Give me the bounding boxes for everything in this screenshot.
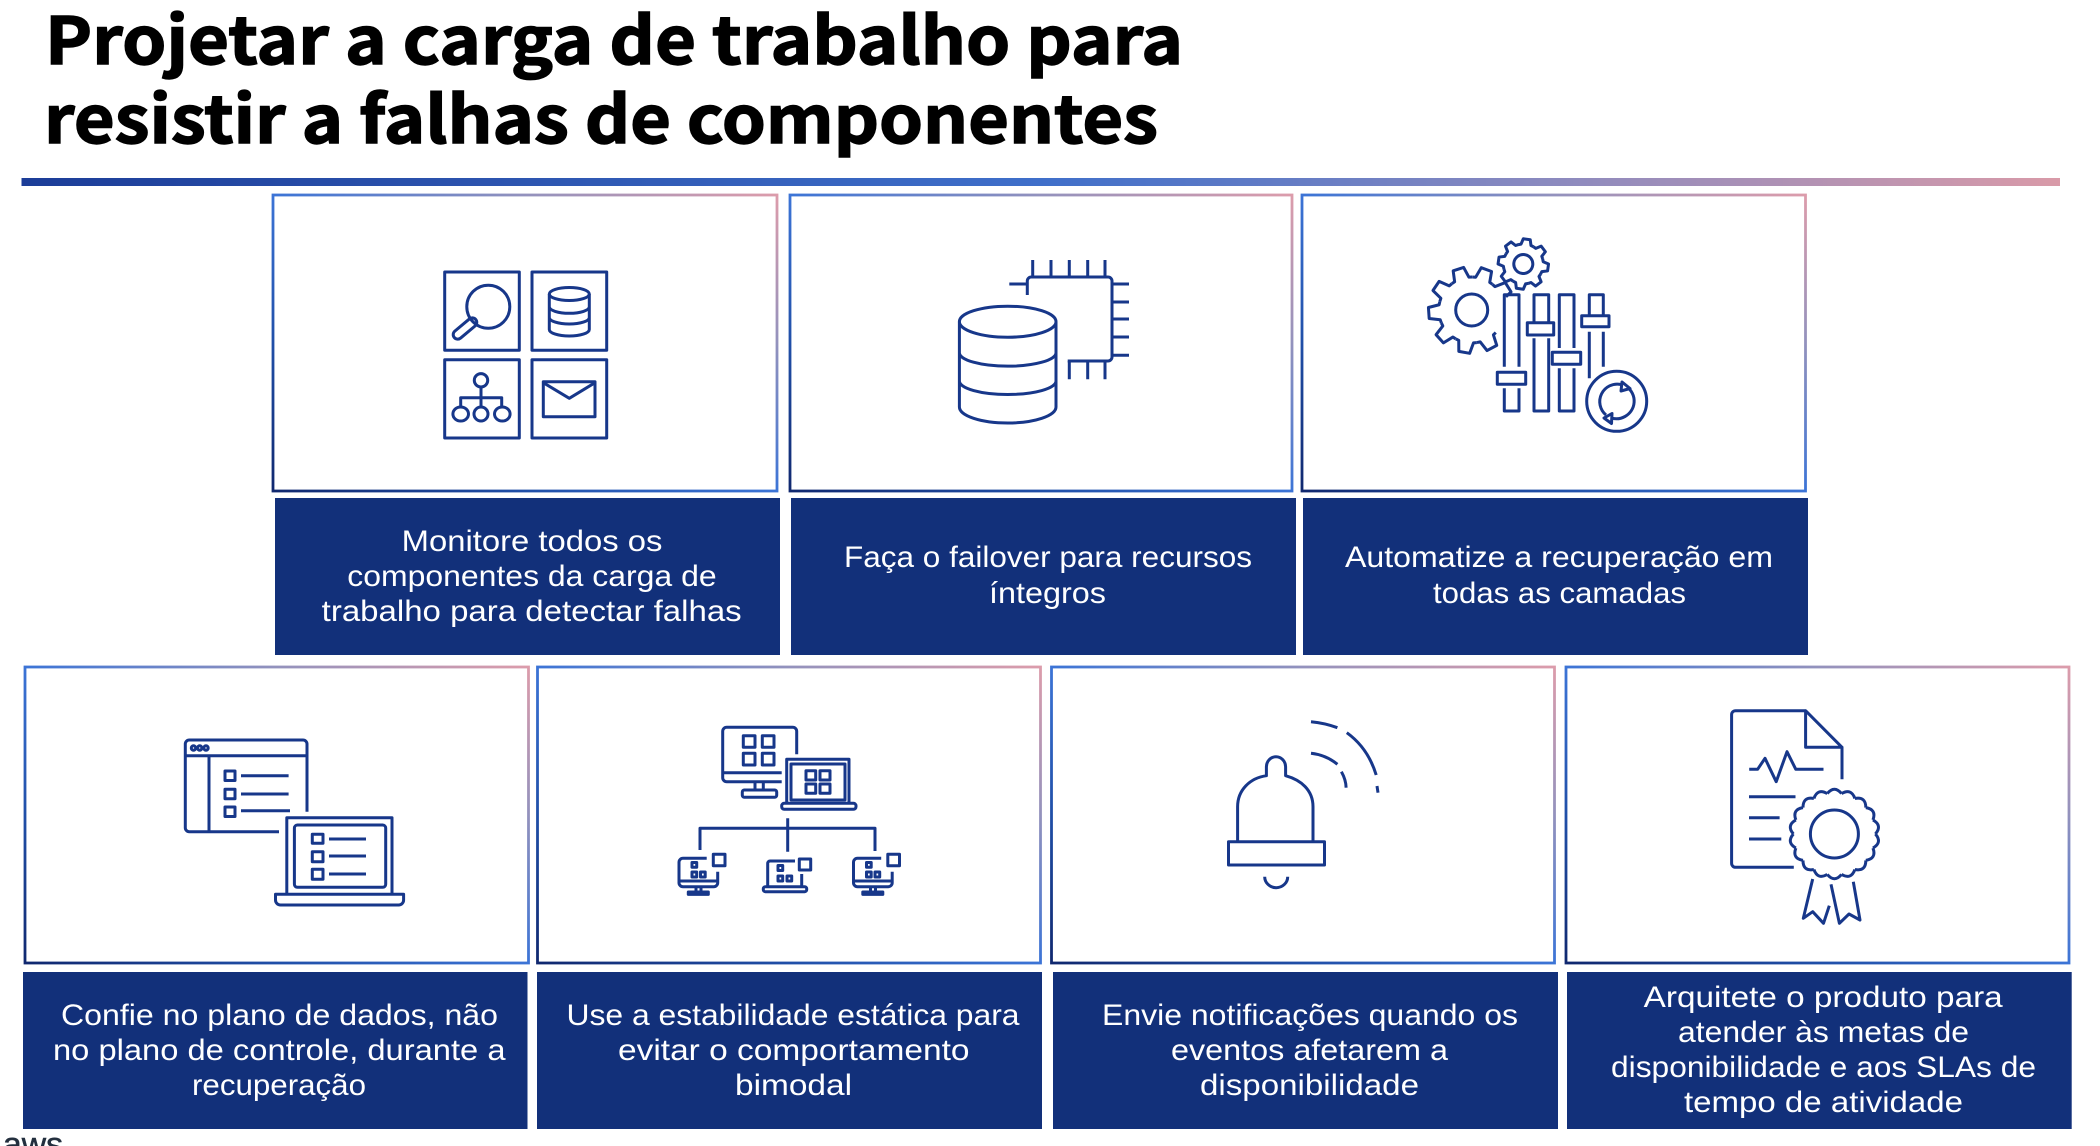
image frame: data plane	[25, 667, 528, 963]
caption: notifications: eventos afetarem a	[1171, 1034, 1448, 1067]
caption: failover: Faça o failover para recursos	[844, 541, 1252, 574]
image frame: notifications	[1052, 667, 1554, 963]
panel: automate recovery	[1302, 195, 1808, 655]
image frame: failover	[790, 195, 1292, 491]
caption: data plane	[23, 972, 528, 1129]
panel: notifications	[1052, 667, 1558, 1129]
caption: automate	[1303, 498, 1808, 655]
caption: failover: íntegros	[989, 577, 1106, 610]
caption: static stability	[537, 972, 1042, 1129]
image frame: static stability	[538, 667, 1040, 963]
caption: data plane: Confie no plano de dados, não	[61, 999, 498, 1032]
icon: window and laptop with lists	[185, 740, 404, 905]
panel: failover	[790, 195, 1296, 655]
caption: architect product: disponibilidade e aos SLAs de	[1611, 1051, 2036, 1084]
panel: architect product	[1566, 667, 2072, 1129]
caption: architect product	[1567, 972, 2072, 1129]
image frame: automate	[1302, 195, 1806, 491]
caption: architect product: Arquitete o produto para	[1644, 981, 2003, 1014]
caption: data plane: recuperação	[192, 1069, 366, 1102]
caption: notifications: Envie notificações quando os	[1102, 999, 1518, 1032]
panel: data plane	[23, 667, 528, 1129]
icon: four tiles with magnifier, database, hierarchy and mail	[445, 272, 607, 438]
title gradient rule	[22, 178, 2060, 186]
image frame: monitor	[273, 195, 777, 491]
caption: failover	[791, 498, 1296, 655]
icon: database with chip	[959, 260, 1129, 423]
caption: monitor	[275, 498, 780, 655]
icon: desktop and laptop network	[679, 727, 900, 894]
caption: notifications	[1053, 972, 1558, 1129]
caption: data plane: no plano de controle, durante a	[53, 1034, 506, 1067]
panel: static stability	[537, 667, 1042, 1129]
caption: monitor: trabalho para detectar falhas	[322, 595, 742, 628]
icon: bell with signal waves	[1228, 722, 1378, 888]
image frame: architect product	[1566, 667, 2069, 963]
caption: architect product: atender às metas de	[1678, 1016, 1969, 1049]
icon: document with certificate seal	[1732, 711, 1880, 923]
caption: architect product: tempo de atividade	[1684, 1086, 1963, 1119]
caption: notifications: disponibilidade	[1200, 1069, 1419, 1102]
caption: automate: todas as camadas	[1433, 577, 1686, 610]
panel: monitor components	[273, 195, 780, 655]
title	[44, 0, 1183, 162]
icon: gears, sliders and refresh	[1428, 236, 1647, 431]
caption: static stability: evitar o comportamento	[618, 1034, 970, 1067]
caption: monitor: Monitore todos os	[402, 525, 662, 558]
title: resistir a falhas de componentes	[44, 68, 1158, 162]
caption: monitor: componentes da carga de	[347, 560, 717, 593]
caption: static stability: Use a estabilidade estática para	[566, 999, 1020, 1032]
caption: automate: Automatize a recuperação em	[1345, 541, 1773, 574]
caption: static stability: bimodal	[735, 1069, 852, 1102]
